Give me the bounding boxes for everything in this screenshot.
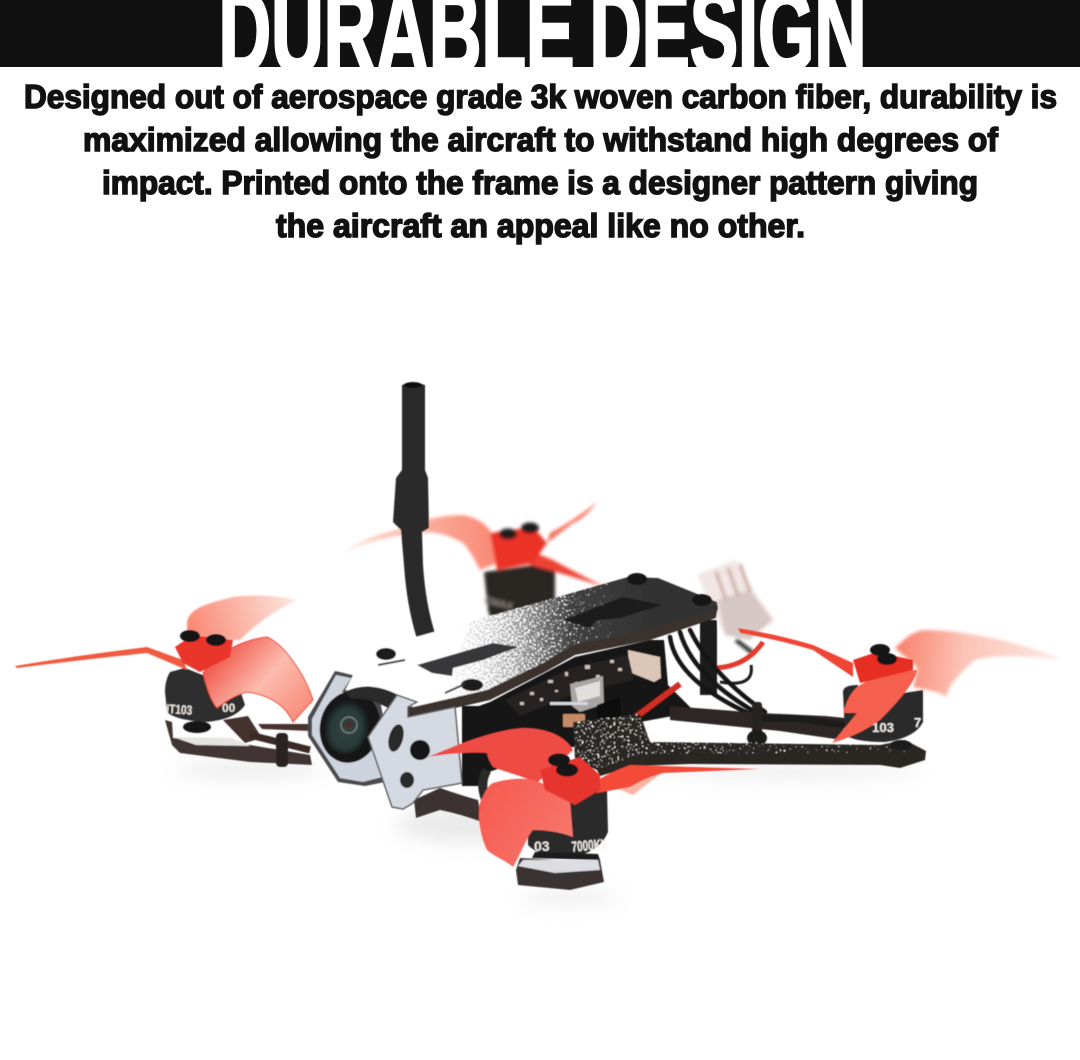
description text block: impact. Printed onto the frame is a designer pattern giving: [102, 164, 978, 201]
right motor: 7: [914, 715, 921, 730]
front propeller: [428, 728, 760, 867]
lower plate with speckle: [572, 714, 927, 777]
red wire: [712, 642, 763, 668]
left propeller: [15, 596, 313, 722]
front motor: 03: [534, 838, 550, 854]
right motor: 103: [872, 720, 894, 735]
left motor: IT103: [166, 701, 193, 718]
wires: [670, 630, 765, 714]
antenna opening: [404, 382, 422, 388]
rear motor and propeller: [343, 502, 605, 632]
left motor base and wires: [165, 716, 312, 767]
drone illustration: [15, 382, 1063, 904]
camera left side plate: [308, 671, 395, 786]
description text block: maximized allowing the aircraft to withstand high degrees of: [83, 121, 999, 158]
motor base plate: [516, 858, 604, 890]
front lower plate: [414, 788, 482, 822]
circuit board components: [505, 655, 634, 716]
front motor: [516, 790, 608, 890]
camera lens: [313, 686, 398, 768]
header band: [0, 0, 1080, 98]
description text block: [24, 78, 1057, 244]
plate screws: [376, 648, 396, 660]
right propeller: [738, 628, 1063, 743]
description text block: Designed out of aerospace grade 3k woven carbon fiber, durability is: [24, 78, 1057, 115]
front slot: [417, 643, 518, 676]
wire bundle: [755, 718, 845, 725]
USB port: [570, 676, 604, 712]
ground shadows: [175, 762, 920, 904]
camera right side plate: [368, 695, 462, 809]
electronics stack: [462, 620, 765, 805]
top plate: [345, 570, 725, 716]
copper component: [563, 714, 585, 727]
VTX antenna board at rear: [697, 560, 775, 654]
right motor: [843, 685, 923, 750]
antenna: [393, 383, 438, 645]
left motor: 00: [222, 701, 236, 715]
rear slots: [563, 597, 662, 628]
rear right arm: [670, 702, 845, 746]
standoffs: [597, 697, 622, 748]
rear motor and propeller: EMAX: [483, 595, 514, 613]
zip tie: [276, 733, 288, 767]
description text block: the aircraft an appeal like no other.: [276, 207, 805, 244]
front motor: 7000KV: [571, 836, 608, 856]
zip tie: [752, 702, 762, 736]
left motor: [165, 668, 245, 722]
connector: [628, 650, 661, 682]
